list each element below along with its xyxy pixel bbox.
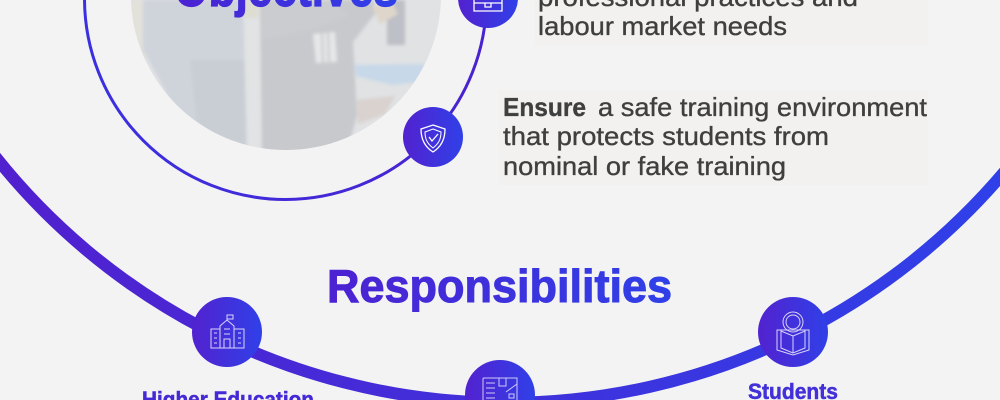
text: ensure a safe training environment: a safe training environment [598, 92, 928, 122]
icon: student reading node [758, 297, 828, 367]
text: ensure a safe training environment: Ensure [503, 92, 586, 122]
icon: shield node [403, 107, 463, 167]
heading: Responsibilities: Responsibilities [327, 260, 672, 312]
icon: higher education building node [192, 297, 262, 367]
large responsibilities arc [0, 155, 1000, 400]
text: ensure a safe training environment: nominal or fake training [503, 151, 786, 181]
text: professional practices and labour market needs: labour market needs [538, 11, 787, 41]
photo: workers in circular crop [125, 0, 445, 160]
text: professional practices and labour market needs [538, 0, 858, 41]
icon: briefcase node [458, 0, 518, 28]
text: ensure a safe training environment [503, 92, 928, 181]
small objectives arc [84, 0, 486, 200]
panel: text highlight ensure [499, 90, 928, 185]
text: ensure a safe training environment: that protects students from [503, 121, 829, 151]
panel: text highlight professional practices [535, 0, 928, 46]
icon: institution buildings node [465, 360, 535, 400]
